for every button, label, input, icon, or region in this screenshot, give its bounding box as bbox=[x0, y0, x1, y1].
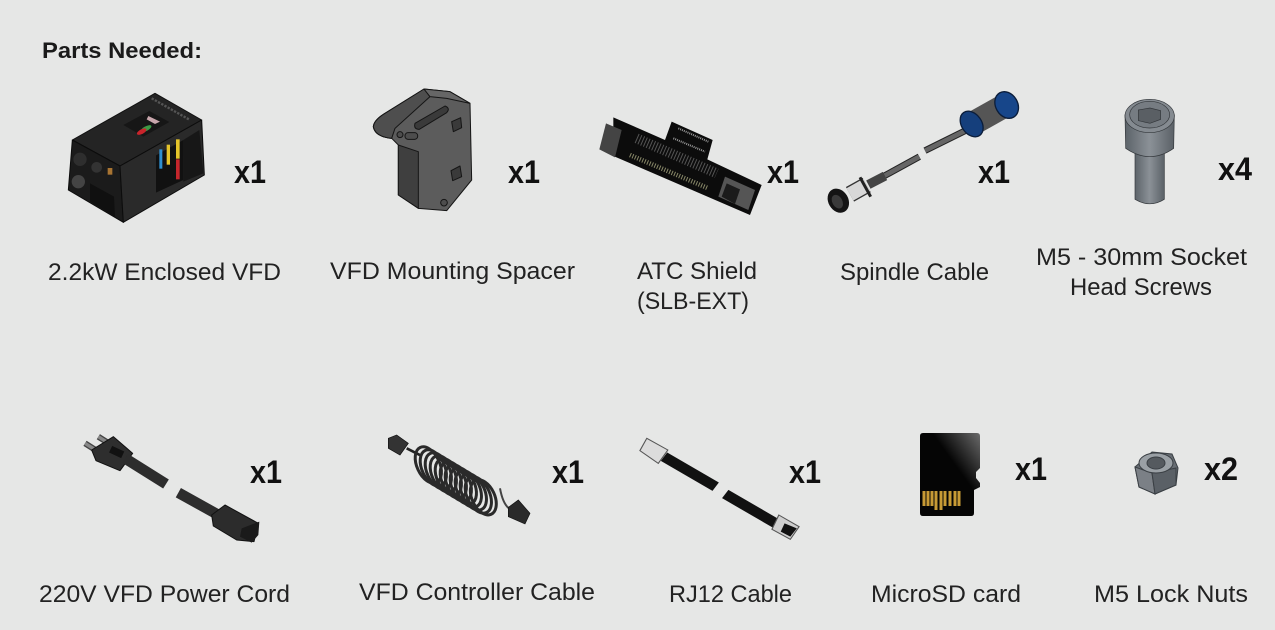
label: Spindle Cable bbox=[840, 259, 989, 286]
icon: VFD enclosure bbox=[68, 93, 204, 222]
part: VFD mounting spacer bbox=[330, 89, 575, 285]
quantity: x1 bbox=[767, 154, 799, 190]
quantity: x1 bbox=[250, 454, 282, 490]
part: microSD card bbox=[871, 433, 1047, 608]
label: 220V VFD Power Cord bbox=[39, 581, 290, 608]
part: power cord bbox=[39, 437, 290, 608]
part: socket head screw bbox=[1036, 99, 1252, 301]
label: 2.2kW Enclosed VFD bbox=[48, 259, 281, 286]
icon: lock nut bbox=[1135, 452, 1178, 494]
label: MicroSD card bbox=[871, 581, 1021, 608]
quantity: x1 bbox=[978, 154, 1010, 190]
part: ATC shield bbox=[599, 117, 799, 315]
part: spindle cable bbox=[823, 87, 1023, 286]
icon: circuit board bbox=[599, 117, 762, 215]
part: VFD controller cable bbox=[359, 435, 595, 606]
quantity: x2 bbox=[1204, 451, 1238, 487]
label: VFD Controller Cable bbox=[359, 579, 595, 606]
icon: socket head screw bbox=[1125, 99, 1174, 204]
icon: coiled cable bbox=[388, 435, 530, 524]
icon: spindle cable bbox=[823, 87, 1023, 217]
gold contacts bbox=[924, 491, 959, 510]
quantity: x1 bbox=[508, 154, 540, 190]
label: RJ12 Cable bbox=[669, 581, 792, 608]
label: M5 Lock Nuts bbox=[1094, 581, 1248, 608]
part: lock nut bbox=[1094, 451, 1248, 608]
part: enclosed VFD bbox=[48, 93, 281, 286]
quantity: x1 bbox=[234, 154, 266, 190]
quantity: x4 bbox=[1218, 151, 1252, 187]
quantity: x1 bbox=[552, 454, 584, 490]
quantity: x1 bbox=[1015, 451, 1047, 487]
label: ATC Shield bbox=[637, 258, 757, 285]
label line 2: (SLB-EXT) bbox=[637, 288, 749, 315]
icon: RJ12 cable bbox=[640, 438, 799, 539]
part: RJ12 cable bbox=[640, 438, 821, 608]
title: Parts Needed: bbox=[42, 38, 202, 63]
label line 2: Head Screws bbox=[1070, 274, 1212, 301]
label: M5 - 30mm Socket bbox=[1036, 244, 1247, 271]
icon: power cord bbox=[85, 437, 259, 543]
label: VFD Mounting Spacer bbox=[330, 258, 575, 285]
quantity: x1 bbox=[789, 454, 821, 490]
icon: microSD card bbox=[920, 433, 980, 516]
icon: spacer bracket bbox=[373, 89, 472, 211]
